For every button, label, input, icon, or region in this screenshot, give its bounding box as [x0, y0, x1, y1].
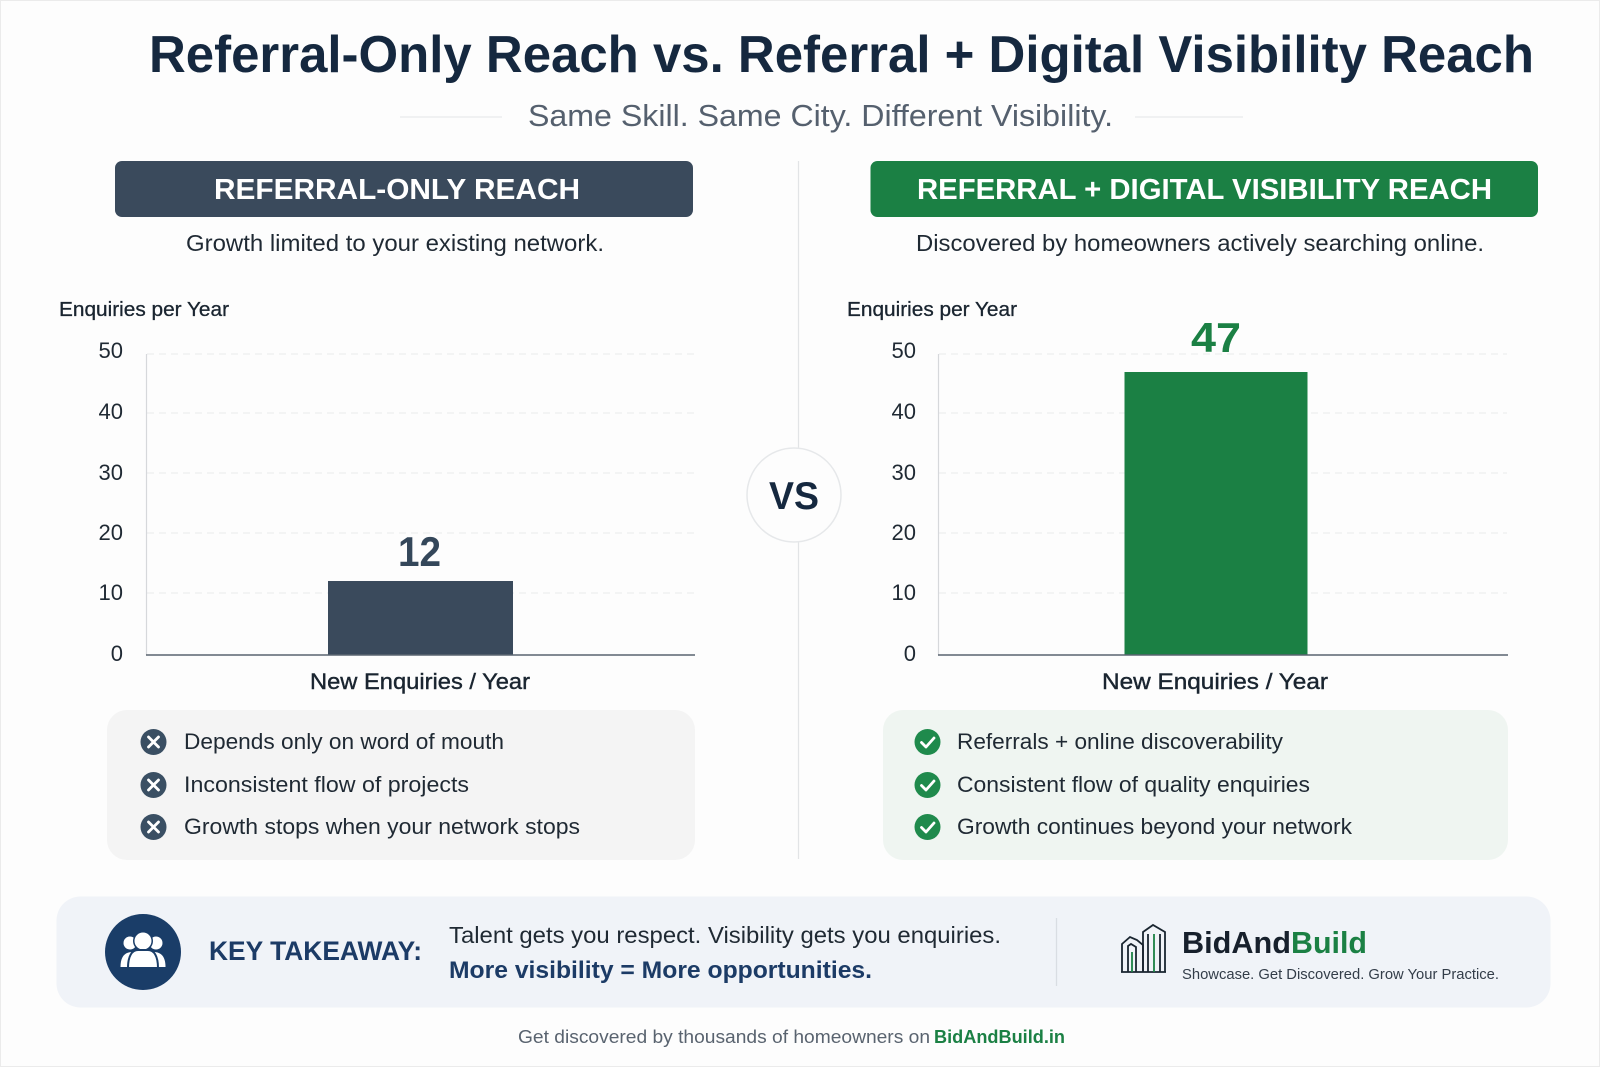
- left drawbacks list: Inconsistent flow of projects: [184, 772, 469, 797]
- left bar chart: Enquiries per Year: [59, 299, 229, 321]
- vs badge: [747, 448, 841, 542]
- right benefits list: Growth continues beyond your network: [957, 814, 1353, 839]
- panel: referral-only reach: [59, 161, 695, 860]
- left bar chart: [59, 299, 695, 694]
- right bar chart: Enquiries per Year: [847, 299, 1017, 321]
- logo: BidAndBuild: Build: [1291, 925, 1367, 960]
- left bar chart: 50: [99, 338, 123, 363]
- footer: BidAndBuild.in: [934, 1027, 1065, 1047]
- icon: cross: [140, 814, 166, 840]
- right bar chart: 10: [892, 580, 916, 605]
- icon: check: [914, 729, 940, 755]
- logo: BidAndBuild: Showcase. Get Discovered. Grow Your Practice.: [1182, 966, 1499, 983]
- right subheading: Discovered by homeowners actively searching online.: [916, 230, 1484, 256]
- vs badge: VS: [769, 475, 819, 518]
- right benefits list: Consistent flow of quality enquiries: [957, 772, 1310, 797]
- left subheading: Growth limited to your existing network.: [186, 230, 604, 256]
- footer: Get discovered by thousands of homeowners on: [518, 1027, 930, 1047]
- takeaway message: More visibility = More opportunities.: [449, 957, 872, 984]
- icon: check: [914, 772, 940, 798]
- right bar chart: 40: [892, 399, 916, 424]
- icon: buildings: [1121, 925, 1166, 972]
- right benefits list: [883, 710, 1508, 860]
- icon: check: [914, 814, 940, 840]
- left drawbacks list: Depends only on word of mouth: [184, 729, 504, 754]
- takeaway message: Talent gets you respect. Visibility gets you enquiries.: [449, 922, 1001, 948]
- left bar chart: 10: [99, 580, 123, 605]
- left bar chart: 0: [111, 641, 123, 666]
- panel: referral + digital visibility reach: [847, 161, 1538, 860]
- right bar chart: [847, 299, 1508, 694]
- icon: cross: [140, 729, 166, 755]
- right header banner: REFERRAL + DIGITAL VISIBILITY REACH: [917, 174, 1492, 206]
- right bar chart: 47: [1191, 314, 1241, 361]
- logo: BidAndBuild: BidAnd: [1182, 925, 1291, 960]
- left bar chart: 20: [99, 520, 123, 545]
- logo: BidAndBuild: [1121, 925, 1499, 983]
- left drawbacks list: [107, 710, 695, 860]
- left header banner: [115, 161, 693, 217]
- right bar chart: 30: [892, 460, 916, 485]
- icon: cross: [140, 772, 166, 798]
- left bar chart: 12: [398, 528, 441, 575]
- title: Referral-Only Reach vs. Referral + Digital Visibility Reach: [149, 26, 1534, 84]
- right header banner: [870, 161, 1538, 217]
- icon: people: [105, 914, 181, 990]
- left bar chart: New Enquiries / Year: [310, 669, 530, 694]
- key takeaway band: [56, 896, 1550, 1008]
- key takeaway label: KEY TAKEAWAY:: [209, 936, 422, 966]
- left bar chart: 30: [99, 460, 123, 485]
- takeaway message: [449, 922, 1001, 984]
- left bar chart: 40: [99, 399, 123, 424]
- left header banner: REFERRAL-ONLY REACH: [214, 174, 580, 206]
- right benefits list: Referrals + online discoverability: [957, 729, 1283, 754]
- right bar chart: New Enquiries / Year: [1102, 669, 1328, 694]
- right bar chart: 20: [892, 520, 916, 545]
- left drawbacks list: Growth stops when your network stops: [184, 814, 580, 839]
- right bar chart: 50: [892, 338, 916, 363]
- right bar chart: 0: [904, 641, 916, 666]
- subtitle: Same Skill. Same City. Different Visibility.: [528, 98, 1113, 133]
